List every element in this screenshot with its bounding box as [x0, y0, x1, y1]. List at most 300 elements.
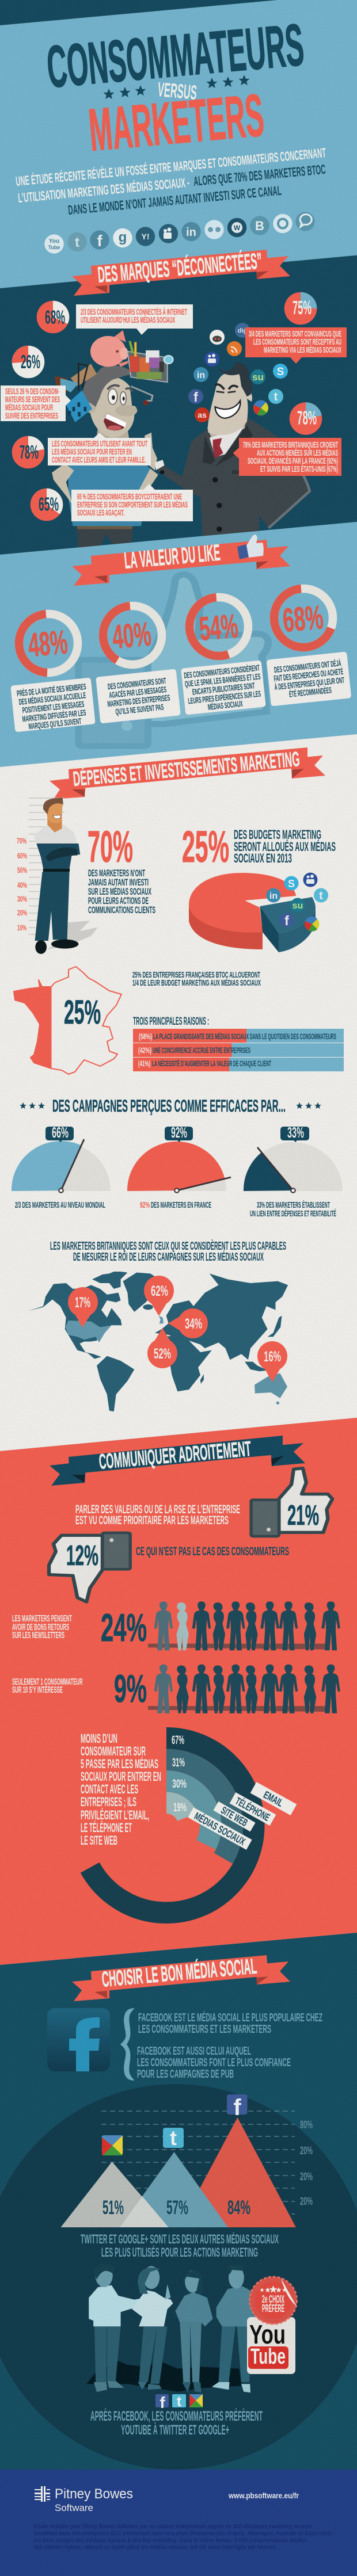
ring: telephone — [101, 1760, 232, 1891]
callout: boycott: 65 % DES CONSOMMATEURS BOYCOTTERAIENT UNE — [77, 492, 182, 502]
icon: twitter: t — [75, 235, 79, 250]
triangle google — [61, 2162, 169, 2227]
icon: linkedin — [181, 222, 201, 241]
card: 54% text: DES CONSOMMATEURS CONSIDÈRENT — [184, 663, 260, 681]
basket and groceries — [55, 364, 97, 422]
icon: skype: S — [288, 878, 295, 890]
ribbon: communiquer adroitement — [50, 1436, 305, 1486]
text: newsletters marketers: SUR LES NEWSLETTERS — [12, 1631, 64, 1640]
silhouettes — [176, 1665, 340, 1713]
big dark circle — [0, 2084, 357, 2470]
thumb hand — [146, 574, 268, 724]
radial values: 31% — [172, 1756, 185, 1769]
badge stars — [260, 2285, 287, 2293]
chart: height scale gridlines and labels: 50% — [17, 865, 27, 875]
head — [208, 372, 252, 435]
label: telephone — [230, 1792, 276, 1826]
cuff button — [109, 1538, 113, 1542]
south america — [97, 1356, 134, 1411]
greenland — [123, 1273, 159, 1312]
wedge outer face — [279, 909, 316, 952]
text: 5 PASSE PAR LES MÉDIAS — [81, 1757, 158, 1771]
panel: footer — [0, 2470, 357, 2576]
callout: follow companies: MATEURS SE SERVENT DES — [5, 395, 60, 404]
icon: digg — [235, 323, 250, 338]
icon: google: g — [119, 230, 127, 245]
pie: 26%: 26% — [21, 351, 40, 372]
pie: 78% left: 78% — [20, 441, 39, 463]
pin: 52% — [147, 1328, 177, 1368]
thumb cuff — [78, 660, 148, 746]
card: 48% text: DES MÉDIAS SOCIAUX ACCUEILLE — [18, 690, 86, 707]
shadow — [48, 921, 98, 949]
text: LES CONSOMMATEURS UTILISENT AVANT TOUT — [52, 439, 147, 449]
text: 25% description: SOCIAUX EN 2013 — [234, 851, 292, 865]
card: 54% text: MÉDIAS SOCIAUX — [207, 699, 244, 712]
heading: british marketers ROI — [50, 1239, 286, 1264]
callout: follow companies: MÉDIAS SOCIAUX POUR — [5, 403, 53, 413]
pie social icons — [266, 872, 328, 932]
badge text — [262, 2293, 284, 2314]
hand on shoulder — [145, 433, 157, 471]
ribbon: la valeur du like — [72, 535, 290, 586]
text: 70% description: DES MARKETERS N’ONT — [88, 868, 145, 879]
chart: height scale gridlines and labels: 60% — [17, 851, 27, 860]
hand — [279, 1468, 332, 1532]
wedge back face — [260, 906, 279, 952]
small icons: facebook twitter google — [155, 2394, 203, 2411]
eyes — [108, 389, 126, 405]
tube text: Tube — [250, 2345, 286, 2369]
crossed arms — [45, 848, 77, 861]
person highlighted man — [154, 1665, 173, 1713]
badge: second choice youtube — [247, 2277, 297, 2374]
logo mark — [35, 2486, 50, 2502]
panel: social media section background — [0, 1933, 357, 2470]
intro text — [15, 144, 326, 217]
shirt collar — [210, 428, 244, 457]
icon: youtube — [44, 234, 64, 254]
gauge: 92% — [127, 1124, 231, 1193]
text: one in ten consumers — [12, 1677, 83, 1695]
icon: youtube: Tube — [48, 245, 60, 250]
gridlines — [101, 2111, 295, 2214]
pocket — [231, 470, 245, 475]
callout: friends and family — [48, 433, 151, 465]
pin: 17% — [68, 1287, 98, 1327]
text: LES MARKETERS PENSENT — [12, 1614, 72, 1624]
shirt — [34, 825, 77, 844]
ring: 68% — [266, 581, 341, 655]
icon: wordpress: W — [234, 224, 241, 232]
text: facebook popular — [138, 2011, 322, 2036]
shirt — [69, 448, 150, 526]
icon: thumb down 12%: 12% — [66, 1540, 98, 1571]
text: 70% description: JAMAIS AUTANT INVESTI — [88, 877, 149, 888]
methodology note: sur leurs usages des médiaux sociaux à des fins marketing. Dans le même temps, 3 000 consommateurs adultes — [33, 2537, 307, 2544]
head — [44, 800, 63, 823]
brows — [108, 386, 132, 391]
values: 57% — [166, 2197, 188, 2219]
gauge captions: 92% — [140, 1200, 150, 1210]
icon: facebook — [90, 230, 109, 250]
legs — [139, 2326, 168, 2384]
pin: 16%: 16% — [264, 1349, 281, 1365]
shadows — [86, 2361, 241, 2392]
card: 54% text — [181, 661, 266, 715]
ring: 48% — [18, 613, 79, 674]
social icons row — [44, 212, 315, 254]
shoes — [94, 2381, 124, 2392]
head — [143, 2266, 159, 2289]
silhouettes — [192, 1601, 340, 1650]
text: less than one consumer in five: ENTREPRISES ; ILS — [81, 1795, 136, 1809]
hair — [83, 365, 134, 407]
stars left — [104, 85, 146, 99]
text: less than one consumer in five: PRIVILÉGIENT L’EMAIL, — [81, 1808, 149, 1822]
chart: height scale gridlines and labels: 30% — [17, 894, 27, 903]
pie: 68%: 68% — [45, 306, 65, 328]
gauge: 66%: 66% — [52, 1124, 69, 1141]
arctic islands — [92, 1272, 127, 1289]
ring: 40% — [92, 595, 173, 676]
icon: myspace — [204, 352, 219, 367]
panel: spending section background — [0, 734, 357, 1451]
methodology note: Etude réalisée pour Pitney Bowes Software par un cabinet indépendant auprès de 300 décideurs marketing seniors — [33, 2523, 312, 2530]
callout: friends and family: LES MÉDIAS SOCIAUX POUR RESTER EN — [52, 447, 132, 457]
pie side — [189, 905, 263, 949]
trousers — [76, 522, 133, 553]
head — [185, 2270, 200, 2292]
ring: 68%: 68% — [281, 598, 325, 639]
text: one in ten consumers: SUR 10 S’Y INTÉRESSE — [12, 1684, 63, 1695]
person 1 — [89, 2264, 146, 2392]
icon: youtube: You — [49, 238, 59, 245]
torso lower — [36, 844, 80, 869]
icon: flickr — [204, 220, 224, 239]
stat: 70% — [88, 822, 155, 915]
pie: 78% right — [290, 402, 322, 435]
shoes — [212, 2382, 250, 2392]
methodology note: travaillant dans des entreprises B2C intervenant dans cinq pays (Royaume-Uni, France, Allemagne, Australie et Etats-Unis) — [33, 2530, 332, 2537]
chart: height scale gridlines and labels: 10% — [17, 923, 26, 932]
intro text: L’UTILISATION MARKETING DES MÉDIAS SOCIAUX - — [17, 174, 190, 205]
axis labels: 80% — [300, 2119, 313, 2131]
icon: lastfm: as — [198, 410, 207, 419]
icon: twitter square: t — [170, 2126, 177, 2150]
raised finger — [165, 2284, 171, 2300]
icon: lastfm — [195, 407, 210, 422]
triangle twitter — [120, 2152, 228, 2227]
pie: 78% left — [12, 436, 44, 468]
icon: reddit — [210, 330, 225, 345]
pin: 34% — [168, 1308, 208, 1338]
head — [89, 376, 137, 438]
cuff button — [267, 1528, 271, 1532]
bar: 42%: (42%) — [138, 1045, 151, 1055]
methodology note: des mêmes régions, utilisant ou ayant utilisé les médias sociaux, ont été aussi interrogés par Internet. — [33, 2544, 277, 2551]
axis labels: 20% — [300, 2171, 313, 2183]
shopping cart — [127, 341, 173, 405]
text: after facebook — [90, 2408, 263, 2438]
france filled part — [14, 980, 51, 1068]
stat: 25%: 25% — [182, 822, 229, 872]
callout: follow companies: SEULS 26 % DES CONSOM- — [5, 387, 59, 396]
axis labels: 20% — [300, 2196, 313, 2208]
icon: linkedin: in — [186, 226, 196, 239]
text: TROIS PRINCIPALES RAISONS : — [133, 1016, 209, 1028]
text: 70% description: POUR LEURS ACTIONS DE — [88, 895, 149, 906]
radial values: 67% — [172, 1734, 184, 1747]
callout: follow companies — [1, 386, 71, 421]
icon: large facebook — [47, 2008, 110, 2071]
smile — [215, 400, 240, 418]
gauge: 33%: 33% — [287, 1124, 304, 1141]
text: AVOIR DE BONS RETOURS — [12, 1623, 69, 1632]
ring: email — [79, 1738, 254, 1913]
ring: social media — [144, 1803, 189, 1848]
jacket — [132, 2290, 173, 2326]
map: France 25%: 25% — [64, 994, 101, 1031]
icon: thumb up 21% — [251, 1468, 332, 1536]
chart: height scale gridlines and labels: 20% — [17, 908, 27, 917]
buttons — [160, 470, 222, 532]
people row: 9% — [148, 1665, 340, 1713]
pupils — [112, 395, 125, 400]
hand — [49, 1535, 102, 1602]
bar: 42%: UNE CONCURRENCE ACCRUE ENTRE ENTREPRISES — [153, 1045, 250, 1055]
icon: blogger: B — [255, 219, 264, 233]
indonesia — [245, 1362, 268, 1371]
teeth — [105, 414, 126, 428]
ring: site web — [122, 1781, 211, 1869]
bar: 58% — [133, 1029, 344, 1043]
dress top — [175, 2292, 213, 2326]
badge: second choice youtube: PRÉFÉRÉ — [262, 2302, 284, 2314]
icon: linkedin: in — [197, 371, 205, 380]
pie: 68% — [37, 301, 69, 333]
person 4 — [212, 2265, 257, 2392]
uk — [159, 1316, 164, 1324]
stat: 70%: 70% — [88, 822, 133, 872]
ring: 48%: 48% — [26, 623, 69, 664]
head — [96, 2264, 113, 2287]
ribbon: des marques déconnectées — [72, 248, 290, 296]
corner curl — [281, 2279, 297, 2306]
url: www.pbsoftware.eu/fr — [228, 2491, 299, 2500]
card: 54% text: ENCARTS PUBLICITAIRES SONT — [192, 681, 255, 697]
icon: twitter: t — [177, 2394, 182, 2410]
head — [229, 2266, 244, 2289]
card: 40% text: AGACÉS PAR LES MESSAGES — [109, 685, 167, 700]
card: 48% text: POSITIVEMENT LES MESSAGES — [22, 700, 85, 715]
pie: 65% — [31, 489, 63, 521]
text: SEULEMENT 1 CONSOMMATEUR — [12, 1677, 83, 1687]
card: 68% text — [267, 652, 351, 706]
chart: 3D pie — [189, 873, 316, 952]
trousers — [35, 872, 70, 941]
pie: 75%: 75% — [293, 297, 312, 318]
callout: connected consumers — [76, 304, 193, 335]
text: 2/3 DES CONSOMMATEURS CONNECTÉS À INTERNET — [81, 307, 187, 317]
hair — [218, 362, 252, 396]
pin: 17%: 17% — [75, 1295, 90, 1311]
callout: boycott: SOCIAUX LES AGAÇAIT. — [77, 508, 124, 518]
ribbon: la valeur du like: LA VALEUR DU LIKE — [123, 540, 221, 574]
floating social icons around the marketer — [188, 323, 288, 422]
icon: skype: S — [277, 366, 284, 378]
text: less than one consumer in five: CONTACT AVEC LES — [81, 1782, 138, 1796]
axis labels: 20% — [300, 2145, 313, 2157]
shirt — [217, 2286, 257, 2326]
map: France 25% — [14, 967, 121, 1074]
icon: google plus — [305, 917, 319, 932]
text: less than one consumer in five: LE SITE WEB — [81, 1833, 117, 1848]
neck — [207, 415, 246, 438]
logo: pitney bowes: Pitney Bowes — [55, 2486, 133, 2502]
neck — [96, 428, 130, 444]
title block — [44, 12, 306, 164]
icon: blogger — [250, 216, 269, 235]
cuff — [251, 1500, 279, 1536]
hair — [138, 2268, 161, 2294]
panel: communicate section background — [0, 1418, 357, 1965]
wedge top — [260, 897, 316, 933]
card: 48% text: MARKETING DIFFUSÉS PAR LES — [22, 708, 86, 724]
radial values: 19% — [173, 1801, 187, 1814]
text: after facebook: YOUTUBE À TWITTER ET GOOGLE+ — [121, 2422, 229, 2438]
pie top — [189, 873, 296, 933]
chart: radial contact channels — [79, 1738, 254, 1913]
gauge captions: DES MARKETERS EN FRANCE — [151, 1200, 211, 1210]
card: 54% text: LEURS PIRES EXPÉRIENCES SUR LES — [188, 689, 261, 706]
ribbon: dépenses et investissements — [50, 747, 325, 799]
chart: triangle usage — [61, 2111, 313, 2227]
callout: boycott — [71, 484, 193, 521]
icon: stumbleupon: su — [252, 372, 264, 383]
icon: stumbleupon — [250, 369, 265, 384]
logo: pitney bowes — [35, 2486, 133, 2513]
bar: 58%: (58%) — [139, 1032, 152, 1041]
icon: facebook — [188, 389, 203, 404]
japan — [268, 1316, 282, 1337]
legs — [180, 2323, 202, 2382]
callout: connected consumers: UTILISENT AUJOURD’HUI LES MÉDIAS SOCIAUX — [81, 315, 175, 325]
shoes — [182, 2382, 202, 2392]
gauge: 33% — [244, 1124, 343, 1193]
pin: 62%: 62% — [151, 1283, 168, 1299]
text: SOCIAUX POUR ENTRER EN — [81, 1769, 161, 1784]
chart: height scale gridlines and labels — [17, 798, 64, 934]
text: newsletters marketers — [12, 1614, 72, 1640]
card: 40% text: DES CONSOMMATEURS SONT — [107, 677, 166, 692]
icon: facebook: f — [97, 232, 102, 250]
brows and eyes — [215, 384, 238, 390]
text: facebook trusted: POUR LES CAMPAGNES DE PUB — [137, 2068, 234, 2081]
shadows — [148, 1644, 328, 1650]
logo: pitney bowes: Software — [55, 2502, 93, 2513]
icon: facebook square — [227, 2094, 248, 2120]
icon: twitter square — [163, 2126, 184, 2150]
stat: 25% — [182, 822, 336, 872]
usa — [65, 1321, 112, 1342]
triangle facebook — [179, 2117, 296, 2227]
icon: thumb — [237, 535, 264, 559]
illustration: big faded thumb — [78, 574, 268, 746]
hair — [43, 798, 63, 814]
north america — [28, 1283, 122, 1359]
you text: You — [249, 2319, 286, 2349]
stat: 9%: 9% — [114, 1667, 147, 1711]
icon: linkedin: in — [269, 891, 278, 901]
pin: 62% — [144, 1276, 174, 1316]
label: medias sociaux — [188, 1807, 252, 1850]
label: telephone: TÉLÉPHONE — [233, 1795, 272, 1823]
icon: thumb up 21%: 21% — [287, 1500, 319, 1531]
text: french companies — [132, 970, 261, 988]
icon: wordpress — [227, 218, 246, 237]
text: 25% description — [234, 827, 336, 865]
methodology note — [33, 2523, 332, 2551]
icon: twitter — [67, 232, 87, 251]
chart: height scale gridlines and labels: 70% — [17, 836, 26, 845]
card: 48% text — [10, 678, 96, 733]
badge: second choice youtube: 2e CHOIX — [262, 2293, 284, 2305]
bar: 41% — [133, 1058, 344, 1071]
card: 48% text: PRÈS DE LA MOITIÉ DES MEMBRES — [16, 682, 87, 699]
icon: thumb down 12% — [49, 1533, 130, 1602]
legs — [94, 2326, 121, 2382]
text: facebook trusted: FACEBOOK EST AUSSI CELUI AUQUEL — [137, 2045, 251, 2058]
values — [102, 2197, 250, 2219]
pin: 52%: 52% — [154, 1346, 171, 1362]
pin: 34%: 34% — [185, 1316, 202, 1332]
icon: facebook: f — [159, 2394, 165, 2411]
icon: facebook: f — [193, 390, 198, 404]
text: twitter and google — [81, 2232, 279, 2260]
panel: value of like background — [0, 522, 357, 767]
card: 40% text: QU’ILS NE SUIVENT PAS — [115, 703, 164, 717]
callout: british marketers — [233, 438, 341, 476]
icon: linkedin — [193, 367, 208, 382]
legs — [219, 2325, 252, 2382]
neck — [47, 817, 62, 833]
shoes — [138, 2382, 162, 2390]
radial values — [172, 1734, 187, 1814]
illustration: businessman 70% height — [34, 798, 98, 954]
icon: google square — [102, 2135, 123, 2155]
people row: 24% — [148, 1601, 340, 1650]
icon: skype — [273, 364, 288, 379]
shoes — [35, 940, 78, 954]
icon: twitter — [268, 389, 283, 404]
hair — [182, 2270, 203, 2294]
icon: twitter: t — [274, 391, 278, 403]
belt — [43, 869, 70, 872]
bar: 42% — [133, 1043, 344, 1057]
nose — [115, 405, 137, 417]
text: 70% description: SUR LES MÉDIAS SOCIAUX — [88, 886, 151, 897]
callout: marketers convinced — [245, 327, 347, 364]
text: COMMUNICATIONS CLIENTS — [88, 905, 155, 915]
brace — [121, 2009, 134, 2080]
cuff — [102, 1533, 130, 1569]
person 3 — [175, 2270, 213, 2392]
text: 70% description — [88, 868, 155, 915]
callout: follow companies: SUIVRE DES ENTREPRISES — [5, 411, 58, 421]
stars — [20, 1102, 321, 1109]
right arm — [139, 468, 158, 490]
